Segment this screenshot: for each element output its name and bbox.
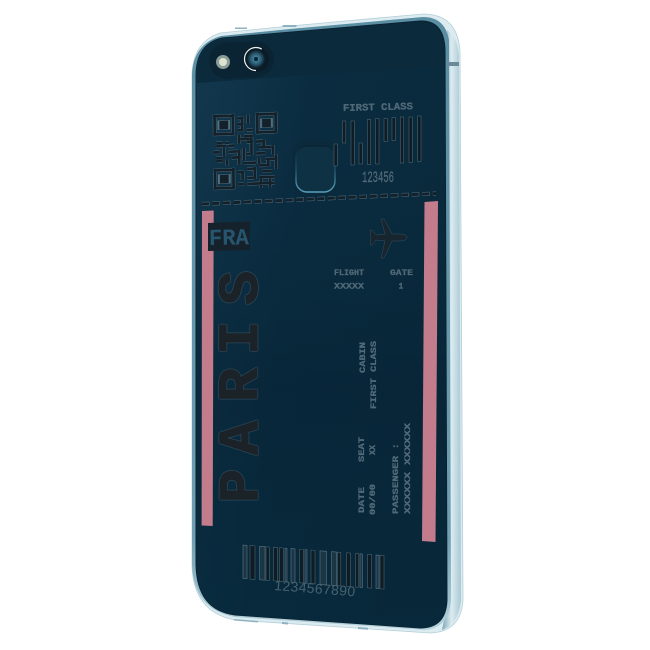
top barcode — [342, 116, 421, 165]
destination: PARIS: I — [211, 321, 275, 355]
destination: PARIS: P — [211, 469, 275, 503]
pink bar: left — [202, 210, 214, 526]
passenger info: XXXXXX XXXXXX — [404, 423, 413, 514]
icon: flash — [216, 55, 230, 69]
date info — [358, 484, 378, 515]
bottom barcode number: 1234567890 — [274, 577, 356, 599]
flight and gate info: XXXXX — [334, 282, 364, 292]
passenger info — [392, 423, 413, 514]
flight and gate info — [334, 269, 413, 292]
dashed tear line — [202, 194, 436, 204]
destination: PARIS: R — [211, 367, 275, 402]
seat info: XX — [369, 445, 378, 455]
seat info — [358, 437, 378, 462]
airport code badge: FRA — [209, 225, 249, 252]
date info: 00/00 — [369, 484, 378, 515]
barcode number: 123456 — [362, 169, 394, 187]
flight and gate info: GATE — [390, 269, 413, 278]
destination: PARIS: S — [211, 271, 275, 305]
cabin info: CABIN — [359, 342, 368, 373]
seat info: SEAT — [358, 437, 367, 462]
antenna band — [447, 62, 459, 66]
destination: PARIS — [211, 271, 275, 503]
date info: DATE — [358, 487, 367, 513]
icon: plane — [370, 219, 407, 258]
QR code — [213, 112, 278, 190]
side buttons — [234, 25, 368, 630]
cabin info — [359, 341, 379, 409]
icon: camera lens — [243, 46, 269, 72]
flight and gate info: 1 — [398, 282, 404, 292]
passenger info: PASSENGER : — [392, 443, 401, 514]
body shading — [196, 21, 447, 628]
fingerprint sensor — [292, 139, 338, 195]
top glass band — [197, 22, 444, 83]
camera module — [208, 40, 275, 80]
pink bar: right — [422, 201, 438, 542]
bottom barcode — [243, 545, 384, 589]
cabin info: FIRST CLASS — [370, 341, 379, 409]
phone back body — [196, 21, 447, 628]
flight and gate info: FLIGHT — [334, 269, 364, 278]
label: first class: FIRST CLASS — [343, 102, 413, 115]
phone case — [192, 14, 463, 633]
destination: PARIS: A — [211, 420, 275, 455]
